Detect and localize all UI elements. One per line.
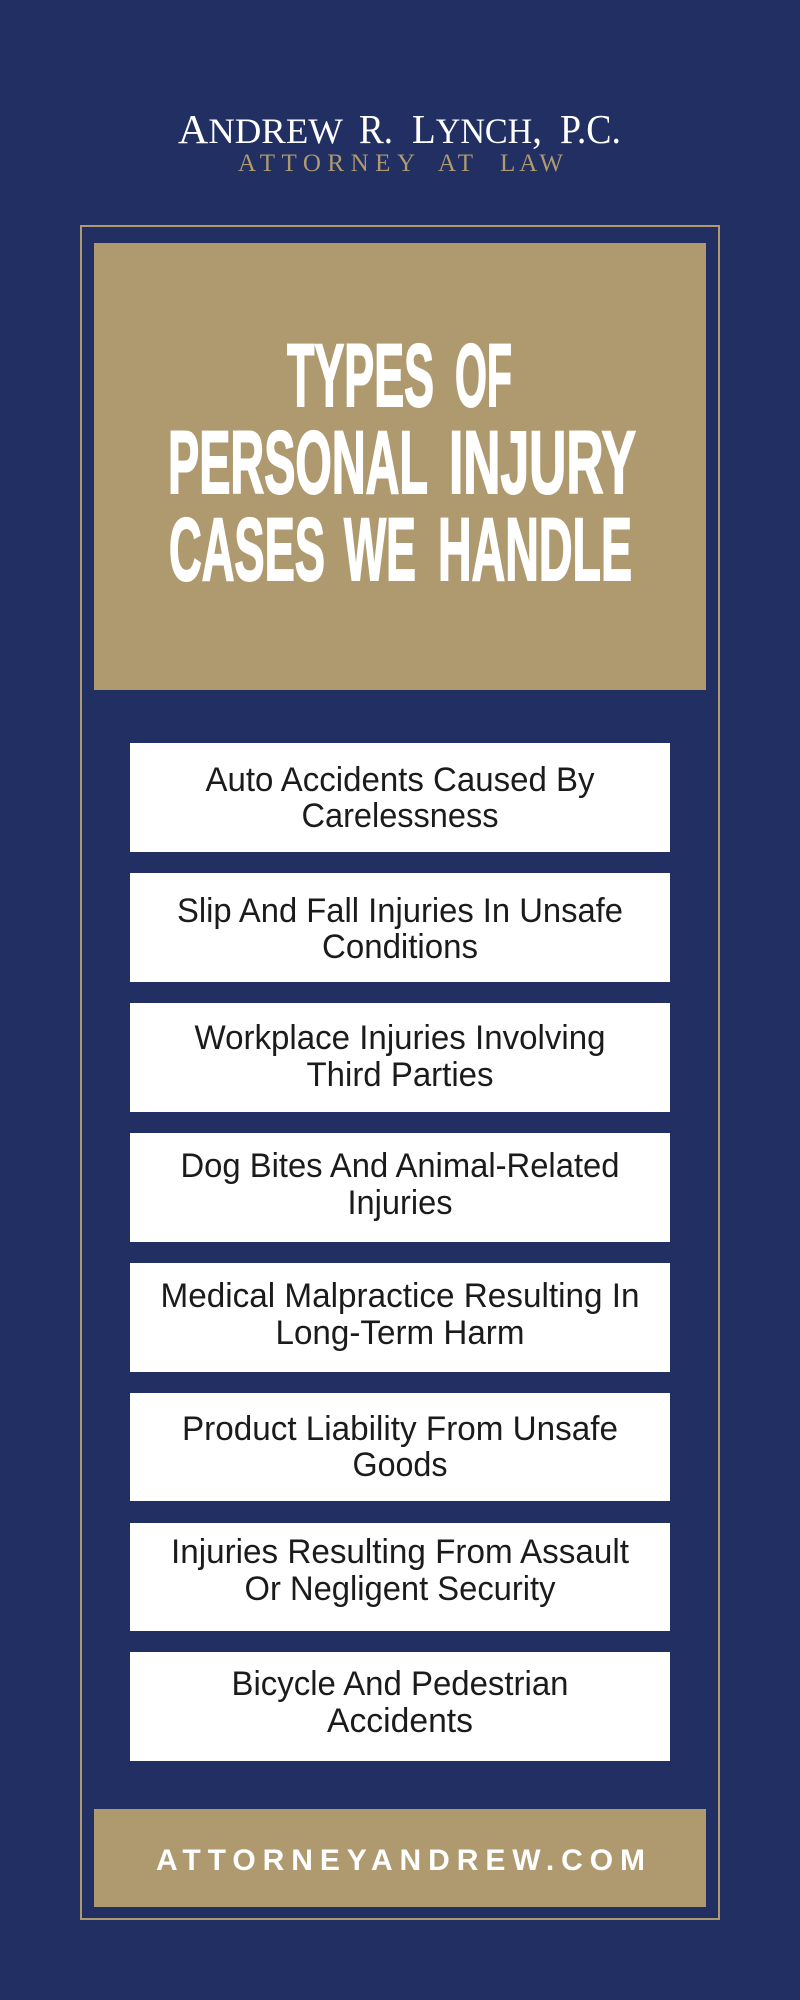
- footer: website: ATTORNEYANDREW.COM: [156, 1844, 645, 1877]
- list item: medical malpractice: [130, 1263, 670, 1372]
- list item: medical malpractice: Long-Term Harm: [276, 1314, 524, 1352]
- tagline: AT: [438, 150, 473, 177]
- tagline: LAW: [500, 150, 563, 177]
- firm name: [178, 106, 621, 152]
- title line 2: PERSONAL: [168, 412, 428, 512]
- list item: dog bites: Injuries: [348, 1184, 452, 1222]
- logo: Andrew R. Lynch, P.C.: [178, 106, 621, 177]
- list item: product liability: [130, 1393, 670, 1501]
- list item: bicycle and pedestrian: [130, 1652, 670, 1761]
- list item: product liability: Product Liability From Unsafe: [182, 1410, 618, 1448]
- list item: dog bites: [130, 1133, 670, 1242]
- firm name: LYNCH,: [412, 106, 542, 152]
- footer: website: [94, 1809, 706, 1907]
- outer gold frame: [81, 226, 719, 1919]
- list item: assault or negligent security: Injuries Resulting From Assault: [171, 1533, 630, 1571]
- tagline: [238, 150, 563, 177]
- list item: assault or negligent security: Or Negligent Security: [244, 1570, 556, 1608]
- list item: auto accidents: [130, 743, 670, 852]
- list item: workplace injuries: Workplace Injuries Involving: [194, 1019, 606, 1057]
- list item: medical malpractice: Medical Malpractice Resulting In: [160, 1277, 640, 1315]
- list item: assault or negligent security: [130, 1523, 670, 1631]
- list item: slip and fall: Conditions: [322, 928, 478, 966]
- firm name: P.C.: [560, 106, 621, 152]
- title line 3: CASES: [169, 499, 325, 599]
- list item: dog bites: Dog Bites And Animal-Related: [180, 1147, 620, 1185]
- list item: bicycle and pedestrian: Bicycle And Pedestrian: [232, 1665, 568, 1703]
- list item: auto accidents: Carelessness: [302, 797, 498, 835]
- tagline: ATTORNEY: [238, 150, 415, 177]
- list item: auto accidents: Auto Accidents Caused By: [206, 761, 594, 799]
- title line 1: TYPES: [287, 325, 434, 425]
- title line 3: WE: [344, 499, 416, 599]
- panel: title: [94, 243, 706, 690]
- firm name: R.: [359, 106, 393, 152]
- list item: slip and fall: Slip And Fall Injuries In Unsafe: [177, 892, 623, 930]
- title line 3: HANDLE: [438, 499, 632, 599]
- firm name: ANDREW: [178, 106, 343, 152]
- list item: bicycle and pedestrian: Accidents: [327, 1702, 473, 1740]
- list item: workplace injuries: [130, 1003, 670, 1112]
- title line 2: INJURY: [449, 412, 636, 512]
- panel: title: OF: [455, 325, 512, 425]
- list item: workplace injuries: Third Parties: [306, 1056, 494, 1094]
- list item: product liability: Goods: [352, 1446, 448, 1484]
- list item: slip and fall: [130, 873, 670, 982]
- title line 3: [169, 499, 632, 599]
